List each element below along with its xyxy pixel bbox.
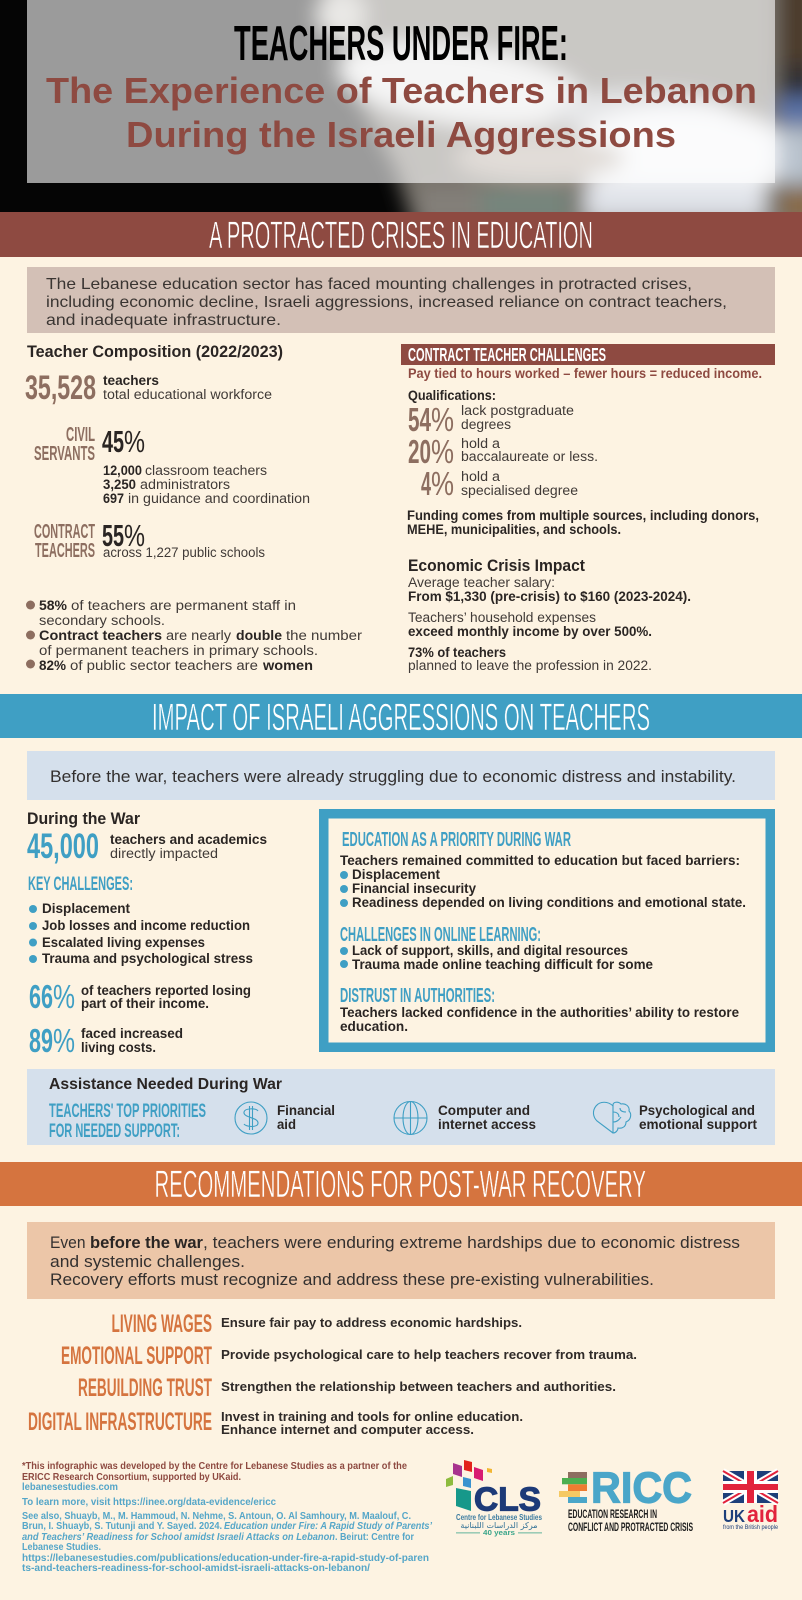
stat: civil servants: 12,000 (103, 463, 142, 478)
funding note: MEHE, municipalities, and schools. (407, 522, 621, 537)
intro panel (27, 267, 775, 333)
qualifications stats: lack postgraduate (461, 403, 574, 418)
economic crisis impact: 73% of teachers (408, 645, 506, 660)
recovery intro panel: Recovery efforts must recognize and address these pre-existing vulnerabilities. (50, 1270, 654, 1289)
recommendation: rebuilding trust (78, 1374, 616, 1402)
bullet list: of teachers are permanent staff in (71, 598, 296, 613)
stat: 45,000: directly impacted (110, 846, 218, 861)
stat: civil servants: % (124, 424, 145, 459)
title panel (27, 0, 775, 183)
recovery intro panel: Even (50, 1233, 86, 1252)
logo: CLS: مركز الدراسات اللبنانية (460, 1521, 538, 1530)
recommendation: living wages: Ensure fair pay to address economic hardships. (221, 1315, 522, 1330)
economic crisis impact: exceed monthly income by over 500%. (408, 624, 652, 639)
subtitle (46, 70, 757, 155)
qualifications stats: 20 (408, 433, 431, 470)
bullet list: of permanent teachers in primary schools. (39, 643, 318, 658)
stat: contract teachers: CONTRACT (34, 521, 95, 543)
challenges in online learning: Trauma made online teaching difficult for some (352, 957, 653, 972)
pay note: Pay tied to hours worked – fewer hours = reduced income. (408, 366, 762, 381)
bullet list: women (262, 658, 313, 673)
logo: ERICC (559, 1464, 693, 1534)
challenges in online learning: Lack of support, skills, and digital resources (352, 943, 628, 958)
hero: blurred photo background (0, 0, 802, 212)
distrust in authorities (340, 985, 739, 1034)
key challenges (28, 873, 253, 966)
economic crisis impact: Economic Crisis Impact (408, 557, 585, 575)
key challenges: Job losses and income reduction (42, 918, 250, 933)
recommendation: rebuilding trust: Strengthen the relationship between teachers and authorities. (221, 1379, 616, 1394)
qualifications stats: % (431, 433, 454, 470)
logo: CLS (446, 1460, 542, 1537)
stat: civil servants: 45 (102, 424, 124, 459)
footer credits: Lebanese Studies. (22, 1542, 101, 1553)
heading: Teacher Composition (2022/2023) (27, 343, 283, 361)
priorities label: FOR NEEDED SUPPORT: (49, 1120, 180, 1142)
stat: 45,000 (27, 827, 267, 866)
recommendation: emotional support: EMOTIONAL SUPPORT (61, 1342, 212, 1370)
distrust in authorities: Teachers lacked confidence in the authorities’ ability to restore (340, 1005, 739, 1020)
footer credits: . Beirut: Centre for (335, 1532, 414, 1543)
stat: total teachers: 35,528 (25, 369, 96, 407)
qualifications stats: baccalaureate or less. (461, 449, 598, 464)
logo: CLS: Centre for Lebanese Studies (456, 1513, 542, 1522)
stat: 66% (29, 978, 251, 1015)
qualifications stats: % (431, 465, 454, 502)
stat: total teachers: total educational workforce (103, 387, 272, 402)
footer credits: Brun, I. Shuayb, S. Tutunji and Y. Sayed. 2024. (22, 1521, 222, 1532)
recovery intro panel: , teachers were enduring extreme hardships due to economic distress (203, 1233, 740, 1252)
psychological support label (639, 1103, 758, 1132)
heading: Assistance Needed During War (49, 1076, 282, 1093)
footer credits: lebanesestudies.com (22, 1482, 118, 1493)
intro panel: including economic decline, Israeli aggressions, increased reliance on contract teachers, (46, 294, 727, 311)
recommendation: digital infrastructure: DIGITAL INFRASTRUCTURE (28, 1408, 212, 1436)
funding note: Funding comes from multiple sources, including donors, (407, 508, 759, 523)
stat: civil servants: 697 (103, 491, 124, 506)
logo: CLS: 40 years (483, 1530, 515, 1537)
footer credits: See also, Shuayb, M., M. Hammoud, N. Nehme, S. Antoun, O. Al Samhoury, M. Maalouf, C. (22, 1511, 411, 1522)
stat: contract teachers: 55 (102, 518, 124, 553)
logo: UKaid (723, 1471, 779, 1531)
recovery intro panel: before the war (90, 1233, 203, 1252)
education as a priority: Readiness depended on living conditions and emotional state. (352, 895, 746, 910)
stat: 89%: living costs. (81, 1040, 156, 1055)
key challenges: Trauma and psychological stress (42, 951, 253, 966)
panel: during the war (27, 810, 267, 1059)
distrust in authorities: DISTRUST IN AUTHORITIES: (340, 985, 495, 1007)
panel: assistance needed (27, 1069, 775, 1145)
logo: UKaid: UK (723, 1506, 745, 1526)
icon: dollar (235, 1102, 267, 1134)
key challenges: KEY CHALLENGES: (28, 873, 133, 895)
stat: civil servants: CIVIL (66, 424, 95, 446)
footer credits: https://lebanesestudies.com/publications/education-under-fire-a-rapid-study-of-paren (22, 1553, 429, 1564)
heading: During the War (27, 810, 141, 828)
stat: civil servants: 3,250 (103, 477, 136, 492)
challenges in online learning: CHALLENGES IN ONLINE LEARNING: (340, 924, 541, 946)
panel: teacher composition (25, 343, 363, 673)
qualifications stats: 54 (408, 401, 431, 438)
stat: contract teachers: across 1,227 public schools (103, 545, 265, 560)
key challenges: Displacement (42, 901, 131, 916)
qualifications stats: Qualifications: (408, 388, 496, 403)
stat: 89%: % (53, 1022, 75, 1059)
key challenges: Escalated living expenses (42, 935, 205, 950)
section banner: protracted crises (0, 212, 802, 257)
qualifications stats: hold a (461, 469, 501, 484)
heading bar: CONTRACT TEACHER CHALLENGES (408, 344, 606, 365)
stat: 66%: 66 (29, 978, 53, 1015)
economic crisis impact: planned to leave the profession in 2022. (408, 658, 652, 673)
recommendation: emotional support: Provide psychological care to help teachers recover from trauma. (221, 1347, 637, 1362)
footer credits: ts-and-teachers-readiness-for-school-amidst-israeli-attacks-on-lebanon/ (22, 1563, 370, 1574)
financial aid label (277, 1103, 335, 1132)
footer credits: ERICC Research Consortium, supported by UKaid. (22, 1472, 241, 1483)
stat: civil servants: SERVANTS (34, 443, 95, 465)
bullet list: double (236, 628, 282, 643)
qualifications stats: hold a (461, 436, 501, 451)
qualifications stats: 4 (421, 465, 431, 502)
bullet list: 58% (39, 598, 67, 613)
intro panel: The Lebanese education sector has faced mounting challenges in protracted crises, (46, 276, 692, 293)
intro panel: and inadequate infrastructure. (46, 312, 281, 329)
stat: 89%: faced increased (81, 1026, 183, 1041)
economic crisis impact (408, 557, 691, 673)
financial aid label: aid (277, 1117, 296, 1132)
education as a priority: EDUCATION AS A PRIORITY DURING WAR (342, 829, 571, 851)
stat: civil servants: classroom teachers (145, 463, 267, 478)
recommendation: rebuilding trust: REBUILDING TRUST (78, 1374, 212, 1402)
qualifications stats: degrees (461, 417, 511, 432)
logo: CLS: CLS (474, 1480, 541, 1518)
stat: 89% (29, 1022, 183, 1059)
recommendation: living wages: LIVING WAGES (112, 1310, 212, 1338)
stat: contract teachers: % (124, 518, 145, 553)
bullet list: 82% (39, 658, 66, 673)
psychological support label: Psychological and (639, 1103, 755, 1118)
stat: 89%: 89 (29, 1022, 53, 1059)
education as a priority: Teachers remained committed to education but faced barriers: (340, 853, 740, 868)
stat: 45,000: teachers and academics (110, 832, 267, 847)
subtitle: The Experience of Teachers in Lebanon (46, 70, 757, 111)
stat: contract teachers (34, 518, 265, 562)
priorities label (49, 1100, 206, 1142)
stat: 45,000: 45,000 (27, 827, 99, 866)
logo: ERICC: CONFLICT AND PROTRACTED CRISIS (568, 1522, 693, 1534)
stat: 66%: % (53, 978, 75, 1015)
stat: 66%: of teachers reported losing (81, 983, 251, 998)
recovery intro panel: and systemic challenges. (50, 1252, 245, 1271)
distrust in authorities: education. (340, 1019, 408, 1034)
recommendation: digital infrastructure (28, 1408, 523, 1437)
recommendation: emotional support (61, 1342, 637, 1370)
context panel (27, 751, 775, 800)
logo: UKaid: from the British people (723, 1525, 779, 1531)
qualifications stats (408, 388, 598, 502)
qualifications stats: specialised degree (461, 483, 578, 498)
panel: education priority box (324, 814, 770, 1047)
footer credits: Education under Fire: A Rapid Study of Parents’ (224, 1521, 432, 1532)
funding note (407, 508, 759, 537)
stat: civil servants (34, 424, 310, 506)
stat: total teachers: teachers (103, 373, 159, 388)
education as a priority: Financial insecurity (352, 881, 477, 896)
bullet list: secondary schools. (39, 613, 165, 628)
bullet list: are nearly (166, 628, 231, 643)
psychological support label: emotional support (639, 1117, 758, 1132)
recovery intro panel (27, 1222, 775, 1299)
priorities label: TEACHERS' TOP PRIORITIES (49, 1100, 206, 1122)
footer credits: To learn more, visit https://inee.org/data-evidence/ericc (22, 1497, 276, 1508)
recommendation: digital infrastructure: Enhance internet and computer access. (221, 1422, 474, 1437)
education as a priority (340, 829, 746, 910)
computer access label: Computer and (438, 1103, 530, 1118)
bullet list: the number (286, 628, 363, 643)
stat: total teachers (25, 369, 272, 407)
economic crisis impact: Average teacher salary: (408, 575, 555, 590)
logo: ERICC: EDUCATION RESEARCH IN (568, 1509, 657, 1521)
footer credits: *This infographic was developed by the Centre for Lebanese Studies as a partner of the (22, 1461, 407, 1472)
stat: civil servants: in guidance and coordination (128, 491, 310, 506)
economic crisis impact: From $1,330 (pre-crisis) to $160 (2023-2024). (408, 589, 691, 604)
computer access label: internet access (438, 1117, 536, 1132)
footer credits (22, 1461, 432, 1574)
icon: globe (394, 1102, 427, 1134)
subtitle: During the Israeli Aggressions (126, 114, 676, 155)
recommendation: digital infrastructure: Invest in training and tools for online education. (221, 1409, 523, 1424)
logo: ERICC: RICC (591, 1464, 692, 1512)
stat: 66%: part of their income. (81, 996, 209, 1011)
computer access label (438, 1103, 536, 1132)
stat: contract teachers: TEACHERS (35, 540, 95, 562)
icon: heart and brain (593, 1102, 631, 1133)
economic crisis impact: Teachers’ household expenses (408, 610, 596, 625)
bullet list: Contract teachers (39, 628, 162, 643)
recommendation: living wages (112, 1310, 522, 1338)
stat: civil servants: administrators (140, 477, 230, 492)
challenges in online learning (340, 924, 653, 972)
financial aid label: Financial (277, 1103, 335, 1118)
context panel: Before the war, teachers were already struggling due to economic distress and instability. (50, 767, 736, 786)
logo: UKaid: aid (747, 1501, 778, 1527)
bullet list: of public sector teachers are (70, 658, 258, 673)
footer credits: and Teachers’ Readiness for School amidst Israeli Attacks on Lebanon (22, 1532, 335, 1543)
qualifications stats: % (431, 401, 454, 438)
education as a priority: Displacement (352, 867, 441, 882)
panel: contract teacher challenges (401, 344, 775, 673)
bullet list (26, 598, 363, 673)
